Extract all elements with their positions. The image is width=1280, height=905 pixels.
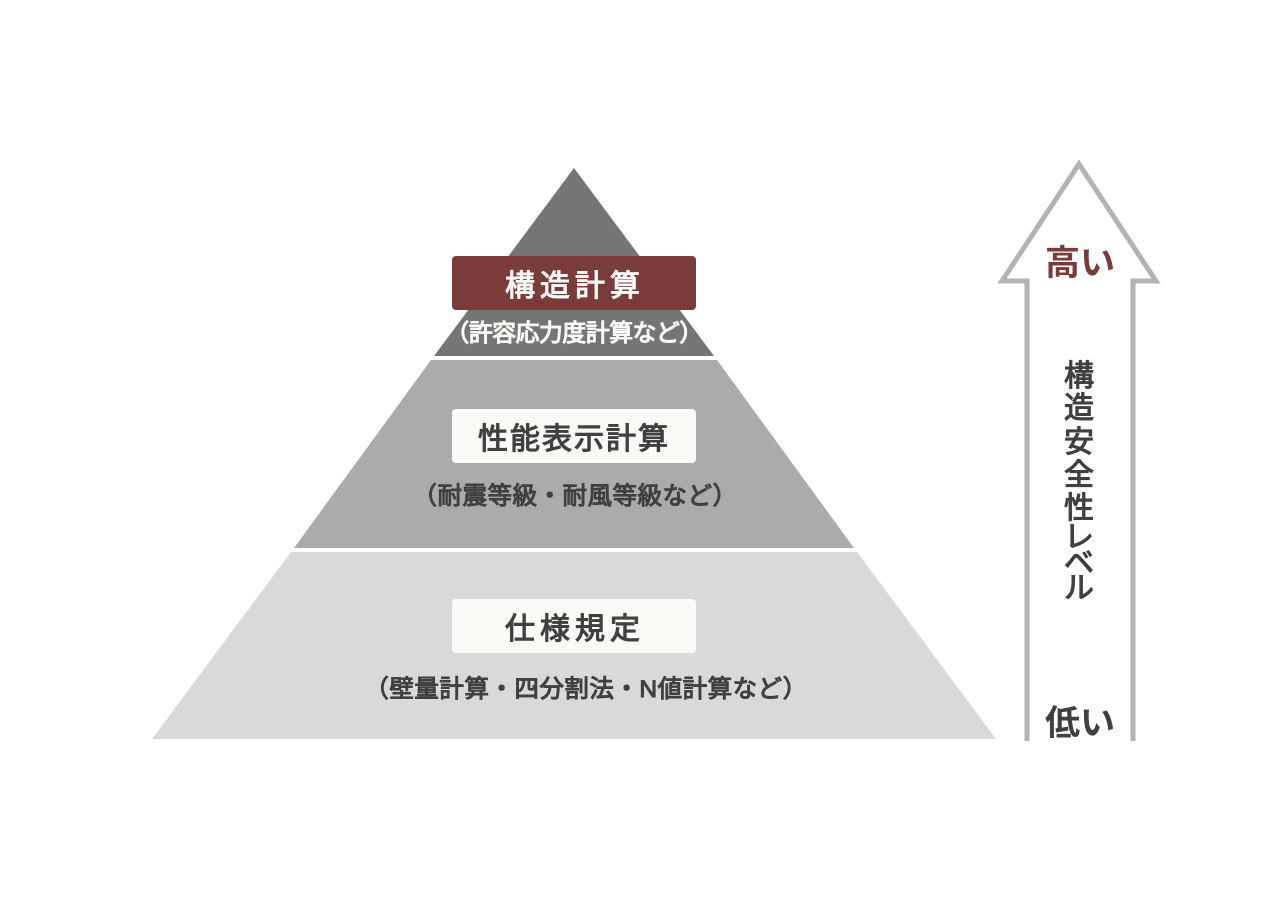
heading: 構造計算: 構造計算 bbox=[505, 270, 645, 303]
vertical label: 構造安全性レベル: ル bbox=[1064, 572, 1094, 605]
vertical label: 構造安全性レベル: 造 bbox=[1064, 392, 1094, 425]
vertical label: 構造安全性レベル: 全 bbox=[1064, 459, 1094, 492]
tier: bottom 仕様規定 bbox=[152, 552, 996, 739]
vertical label: 構造安全性レベル: レ bbox=[1064, 521, 1094, 554]
vertical label: 構造安全性レベル: ベ bbox=[1064, 547, 1094, 580]
middle trapezoid bbox=[294, 360, 854, 548]
heading: 性能表示計算: 性能表示計算 bbox=[478, 423, 670, 456]
arrow outline bbox=[1002, 164, 1156, 741]
top triangle bbox=[434, 168, 714, 356]
level arrow bbox=[1002, 164, 1156, 743]
subtext: 壁量計算・四分割法・N値計算など: （壁量計算・四分割法・N値計算など） bbox=[364, 675, 808, 703]
label: 高い: 高い bbox=[1045, 244, 1115, 283]
label plate: 仕様規定 bbox=[452, 599, 696, 653]
vertical label: 構造安全性レベル: 構 bbox=[1064, 360, 1094, 393]
bottom trapezoid bbox=[152, 552, 996, 739]
pyramid bbox=[152, 168, 996, 739]
vertical label: 構造安全性レベル: 性 bbox=[1064, 492, 1094, 525]
label: 低い: 低い bbox=[1045, 704, 1115, 743]
label plate: 構造計算 bbox=[452, 256, 696, 310]
subtext: 耐震等級・耐風等級など: （耐震等級・耐風等級など） bbox=[412, 482, 738, 510]
tier: middle 性能表示計算 bbox=[294, 360, 854, 548]
heading: 仕様規定: 仕様規定 bbox=[505, 613, 645, 646]
label plate: 性能表示計算 bbox=[452, 409, 696, 463]
tier: top 構造計算 bbox=[434, 168, 714, 356]
vertical label: 構造安全性レベル: 安 bbox=[1064, 426, 1094, 459]
subtext: 許容応力度計算など: （許容応力度計算など） bbox=[445, 320, 703, 347]
